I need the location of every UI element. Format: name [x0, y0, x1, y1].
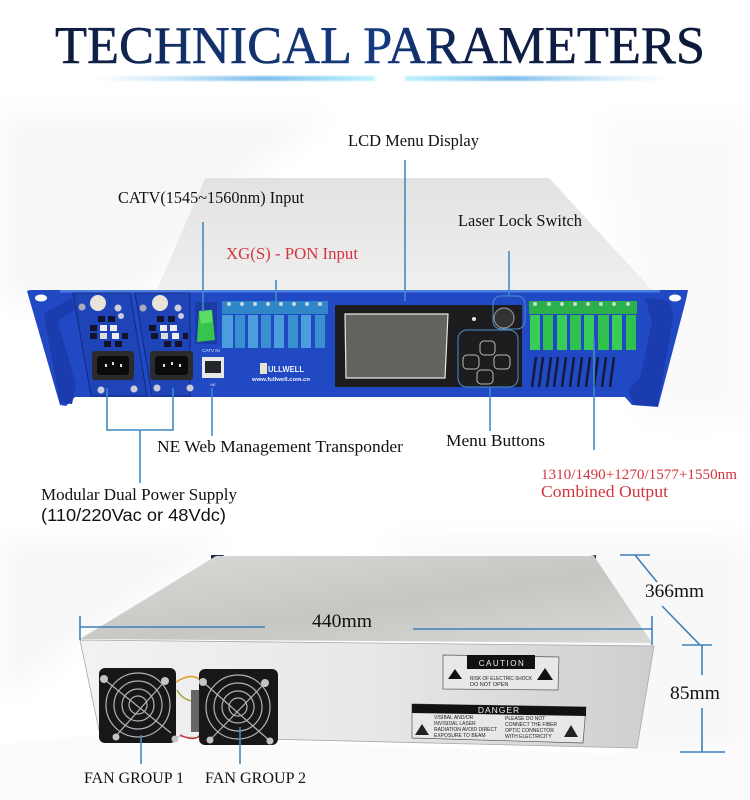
- label: Laser Lock Switch: Laser Lock Switch: [458, 211, 582, 230]
- label: Laser Lock Switch: [458, 211, 582, 296]
- title glow underline: [90, 76, 670, 81]
- caution label: DO NOT OPEN: [470, 682, 508, 688]
- vent slots: [532, 357, 614, 387]
- front panel device: [27, 290, 688, 407]
- label: modular dual power supply: [41, 388, 237, 525]
- title: TECHNICAL PARAMETERS: [55, 17, 705, 75]
- caution label: RISK OF ELECTRIC SHOCK: [470, 676, 532, 682]
- label: XG(S) PON Input: XG(S) - PON Input: [226, 244, 358, 263]
- label: LCD Menu Display: LCD Menu Display: [348, 131, 479, 150]
- label: FAN GROUP 1: FAN GROUP 1: [84, 770, 184, 787]
- status LED: [472, 317, 476, 321]
- label: combined output: [541, 338, 737, 501]
- label: XG(S) PON Input: [226, 244, 358, 303]
- panel: blue faceplate: [27, 290, 688, 407]
- label: Menu Buttons: Menu Buttons: [446, 431, 545, 450]
- FULLWELL logo: ULLWELL: [268, 364, 304, 374]
- label: FAN GROUP 2: FAN GROUP 2: [205, 770, 306, 787]
- right handle: [628, 298, 673, 406]
- label: modular dual power supply: Modular Dual Power Supply: [41, 485, 237, 504]
- CATV input connector: [195, 302, 220, 353]
- LCD screen: [345, 314, 448, 378]
- danger label: OPTIC CONNECTOR: [505, 728, 554, 734]
- dimension: 85mm: 85mm: [670, 683, 720, 704]
- dimension: 366mm: [620, 555, 704, 645]
- label: modular dual power supply: (110/220Vac or 48Vdc): [41, 505, 226, 525]
- danger label: VISIBAL AND/OR: [434, 715, 474, 721]
- FULLWELL logo: [251, 363, 311, 383]
- danger label: WITH ELECTRICITY: [505, 734, 552, 740]
- dimension: 366mm: 366mm: [645, 581, 704, 602]
- label: combined output: Combined Output: [541, 482, 668, 501]
- menu buttons: [458, 330, 518, 387]
- fan group 1: [99, 668, 178, 743]
- danger label: CONNECT THE FIBER: [505, 722, 557, 728]
- dimension: 85mm: [670, 645, 725, 752]
- danger label: RADIATION AVOID DIRECT: [434, 727, 497, 733]
- danger label: PLEASE DO NOT: [505, 716, 545, 722]
- danger label: INVISIDAL LASER: [434, 721, 476, 727]
- danger label: DANGER: [478, 705, 520, 715]
- FULLWELL logo: www.fullwell.com.cn: [251, 377, 311, 383]
- rear unit device: [80, 555, 654, 748]
- ear mounting holes: [35, 294, 681, 302]
- power module 2: [135, 293, 194, 396]
- dimension: 440mm: [80, 611, 652, 645]
- label: CATV input: CATV(1545~1560nm) Input: [118, 188, 304, 207]
- rear unit face: [80, 640, 654, 748]
- CATV input connector: CATV IN: [202, 348, 220, 353]
- green output connectors: [529, 301, 637, 350]
- fan wires: [176, 676, 201, 738]
- NE network port: NE: [210, 382, 216, 387]
- label: combined output: 1310/1490+1270/1577+1550nm: [541, 467, 737, 483]
- rear ears: [211, 555, 596, 579]
- LCD display bezel: [335, 305, 522, 387]
- fan group 2: [199, 669, 278, 745]
- dimension: 440mm: 440mm: [312, 611, 372, 632]
- label: FAN GROUP 1: [84, 735, 184, 787]
- rear unit top cover: [80, 556, 652, 643]
- left handle: [44, 298, 76, 404]
- danger label: EXPOSURE TO BEAM: [434, 733, 486, 739]
- power module 1: [73, 293, 147, 396]
- label: NE Web Management Transponder: NE Web Management Transponder: [157, 437, 403, 456]
- front unit chassis top: [157, 178, 652, 290]
- NE network port: [202, 357, 224, 387]
- danger label: [412, 704, 586, 743]
- label: FAN GROUP 2: [205, 727, 306, 787]
- label: Menu Buttons: [446, 388, 545, 450]
- laser lock switch: [493, 296, 525, 329]
- caution label: [443, 655, 559, 690]
- blue input connectors: [222, 301, 328, 348]
- caution label: CAUTION: [479, 659, 525, 668]
